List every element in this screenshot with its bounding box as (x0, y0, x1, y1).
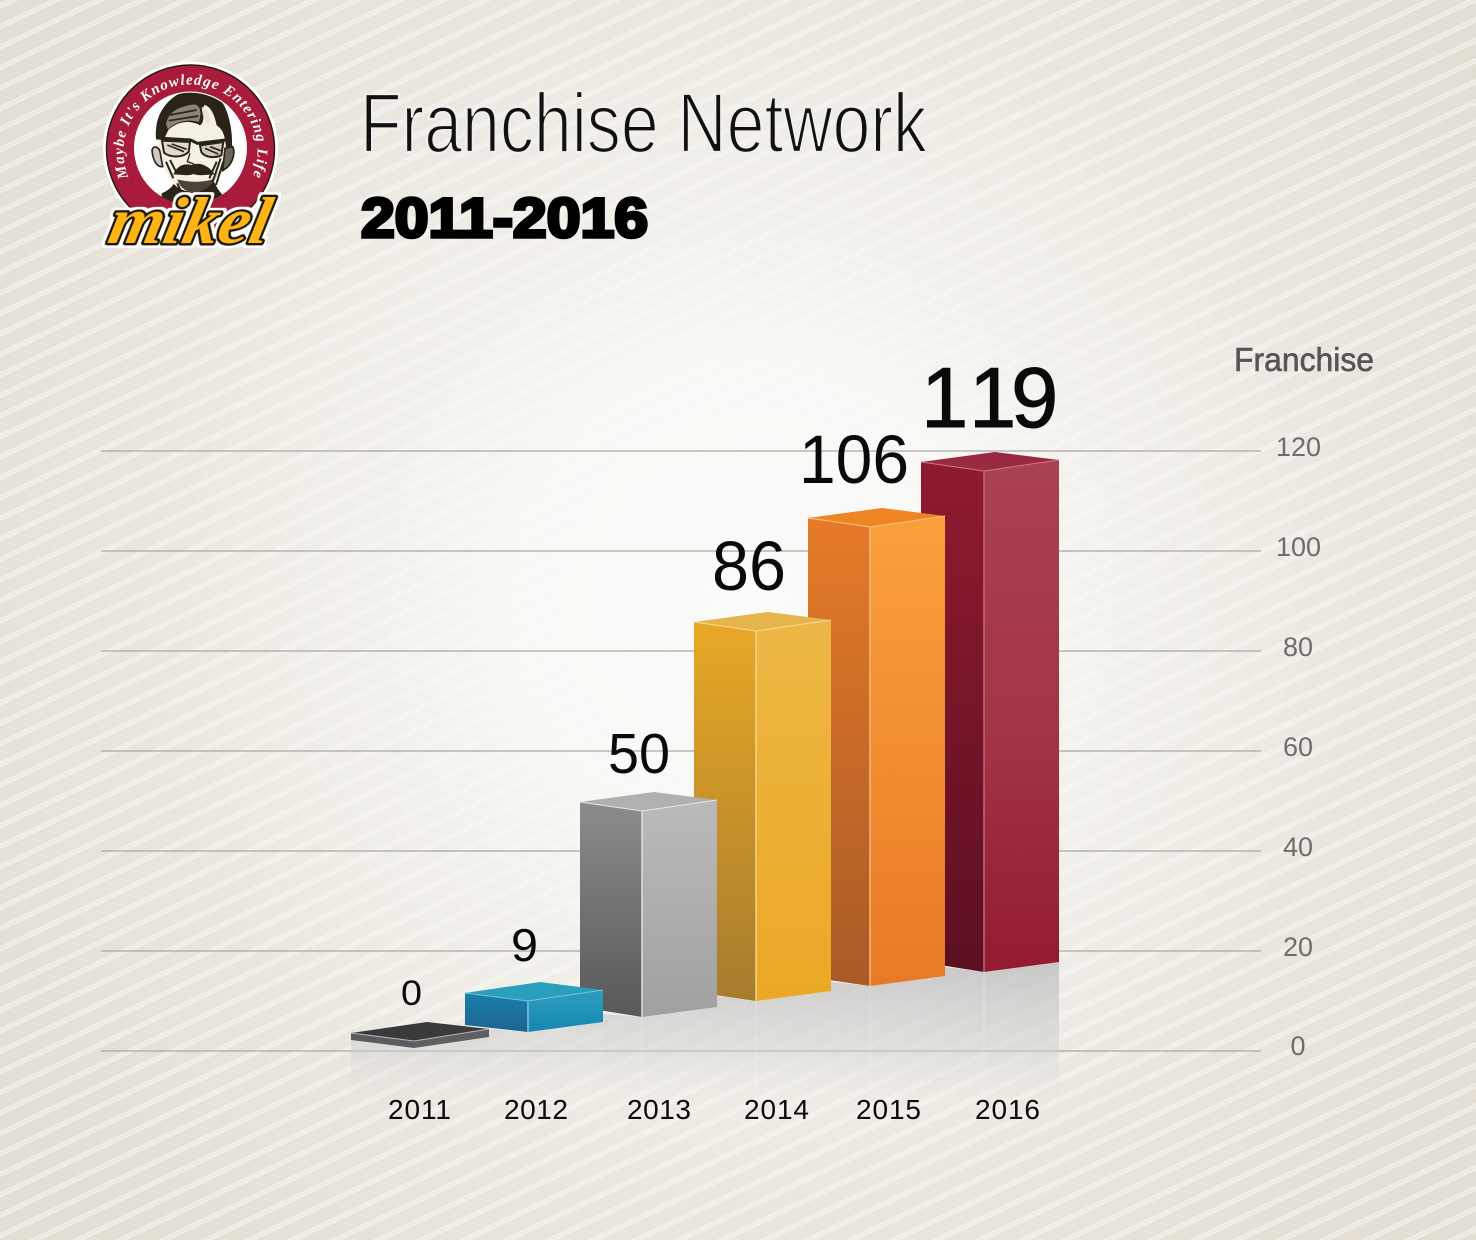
grid lines (101, 451, 1261, 1051)
title: Franchise Network (360, 76, 928, 170)
subtitle: 2011-2016 (361, 186, 648, 249)
y axis labels: 120 (1276, 432, 1321, 462)
x axis labels: 2011 (388, 1094, 451, 1125)
y axis labels: 0 (1290, 1031, 1306, 1061)
bar 2012 (465, 982, 603, 1032)
reflection facet lines (642, 972, 984, 1090)
x axis labels: 2014 (744, 1094, 809, 1125)
value labels (401, 351, 1058, 1013)
x axis labels: 2012 (504, 1094, 568, 1125)
bar 2015 (808, 508, 945, 986)
x axis labels: 2015 (856, 1094, 921, 1125)
logo ring text: Maybe It's Knowledge Entering Life (113, 74, 268, 179)
logo: mikel (102, 62, 282, 258)
y axis labels (1276, 432, 1321, 1061)
value labels: 119 (921, 351, 1058, 446)
value labels: 50 (608, 722, 670, 786)
y axis labels: 40 (1283, 832, 1313, 862)
bar 2014 (694, 612, 831, 1001)
value labels: 86 (712, 527, 786, 605)
axis title: Franchise (1234, 341, 1374, 378)
logo portrait (152, 91, 234, 210)
bar 2011 (351, 1022, 489, 1048)
bar reflections (351, 962, 1059, 1100)
y axis labels: 80 (1283, 632, 1313, 662)
x axis labels: 2013 (627, 1094, 691, 1125)
x axis labels: 2016 (975, 1094, 1040, 1125)
value labels: 0 (401, 974, 422, 1013)
y axis labels: 60 (1283, 732, 1313, 762)
logo badge (103, 62, 278, 236)
bar 2013 (580, 792, 717, 1017)
x axis labels (388, 1094, 1040, 1125)
y axis labels: 20 (1283, 932, 1313, 962)
logo wordmark: mikel (103, 186, 279, 258)
value labels: 9 (511, 919, 538, 971)
bar 2016 (921, 452, 1059, 972)
y axis labels: 100 (1276, 532, 1321, 562)
value labels: 106 (799, 421, 909, 498)
